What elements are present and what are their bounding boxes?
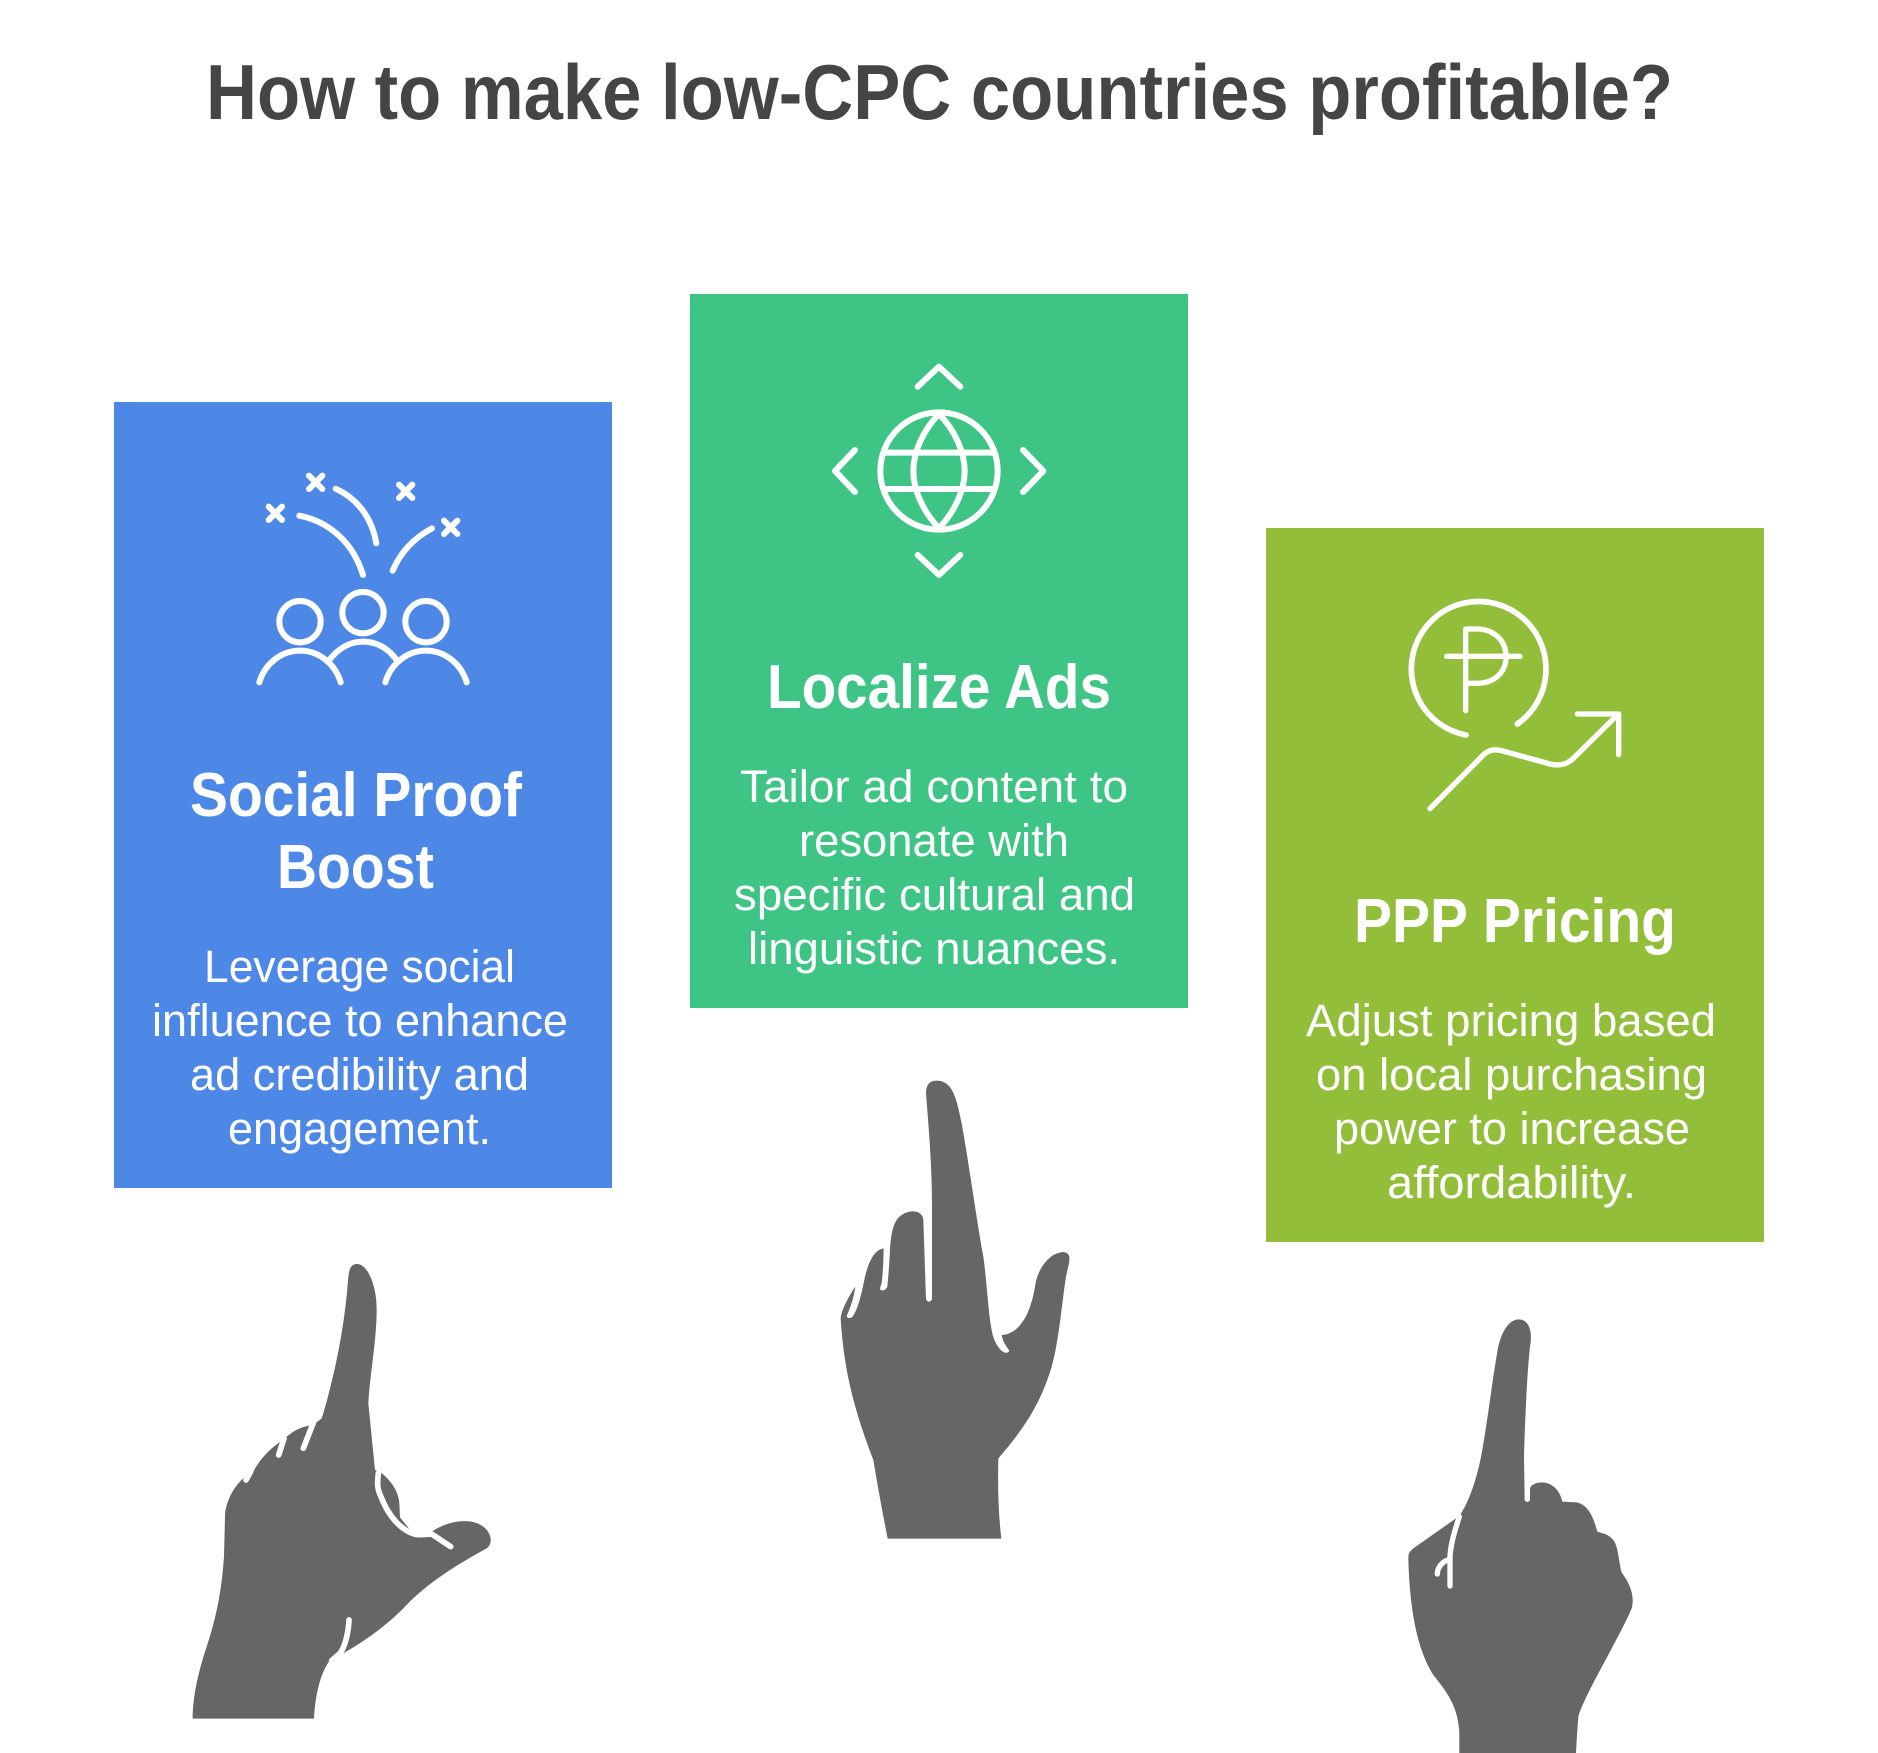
description: social proof boost: Leverage social bbox=[204, 941, 515, 992]
panel: localize ads bbox=[690, 294, 1188, 1008]
panel background: olive green bbox=[1266, 528, 1764, 1242]
description: localize ads: linguistic nuances. bbox=[748, 923, 1120, 974]
description: social proof boost: engagement. bbox=[228, 1103, 491, 1154]
icon: globe with arrows bbox=[835, 367, 1043, 575]
description: ppp pricing: power to increase bbox=[1334, 1103, 1690, 1154]
icon: currency coin with rising arrow bbox=[1411, 602, 1619, 809]
heading: social proof boost bbox=[190, 761, 522, 902]
heading: social proof boost: Boost bbox=[277, 833, 434, 902]
heading: social proof boost: Social Proof bbox=[190, 761, 522, 830]
icon: hand pointing up, center bbox=[841, 1081, 1069, 1539]
description: social proof boost bbox=[152, 941, 568, 1154]
description: localize ads: specific cultural and bbox=[734, 869, 1135, 920]
icon: hand pointing up, right bbox=[1408, 1319, 1633, 1753]
description: ppp pricing: on local purchasing bbox=[1316, 1049, 1707, 1100]
panel background: blue bbox=[114, 402, 612, 1188]
description: ppp pricing bbox=[1306, 995, 1716, 1208]
icon: hand pointing up, left bbox=[193, 1264, 491, 1719]
description: ppp pricing: affordability. bbox=[1387, 1157, 1636, 1208]
panel: social proof boost bbox=[114, 402, 612, 1188]
description: social proof boost: ad credibility and bbox=[190, 1049, 529, 1100]
description: social proof boost: influence to enhance bbox=[152, 995, 568, 1046]
title: How to make low-CPC countries profitable? bbox=[206, 48, 1673, 136]
description: localize ads: Tailor ad content to bbox=[740, 761, 1128, 812]
panel: ppp pricing bbox=[1266, 528, 1764, 1242]
panel background: green bbox=[690, 294, 1188, 1008]
description: ppp pricing: Adjust pricing based bbox=[1306, 995, 1716, 1046]
description: localize ads bbox=[734, 761, 1135, 974]
heading: localize ads: Localize Ads bbox=[767, 653, 1111, 722]
icon: crowd with fireworks bbox=[259, 476, 467, 682]
heading: ppp pricing: PPP Pricing bbox=[1354, 887, 1676, 956]
description: localize ads: resonate with bbox=[799, 815, 1069, 866]
